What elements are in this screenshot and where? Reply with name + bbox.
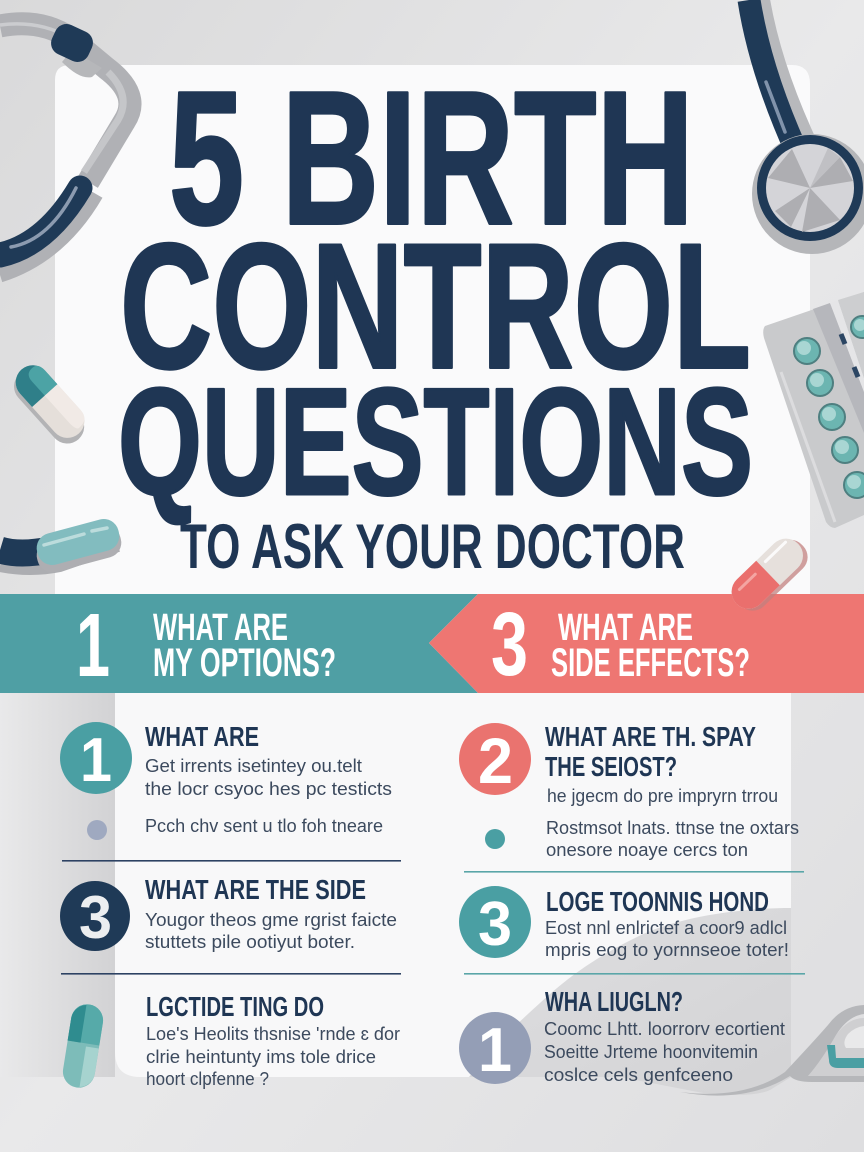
- heading: WHAT ARE TH. SPAY: [545, 721, 756, 752]
- body: [546, 786, 799, 860]
- band heading left: WHAT ARE: [153, 607, 288, 649]
- body: [145, 910, 397, 952]
- body: Get irrents isetintey ou.telt: [145, 756, 362, 776]
- divider left 2: [61, 973, 401, 975]
- band: teal option: [0, 594, 478, 696]
- icon: blister pack: [763, 292, 864, 528]
- body: [545, 918, 789, 960]
- body: [544, 1019, 785, 1085]
- body: [146, 1024, 400, 1089]
- badge 3: [60, 881, 130, 951]
- question: left 3: [60, 874, 397, 952]
- divider right 2: [464, 973, 805, 975]
- badge 1: [60, 722, 132, 795]
- heading: WHAT ARE: [145, 721, 259, 752]
- heading: THE SEIOST?: [545, 751, 677, 782]
- body: [145, 756, 392, 836]
- band heading left: [153, 607, 336, 685]
- icon: stethoscope top left: [0, 20, 130, 275]
- heading: WHA LIUGLN?: [545, 986, 683, 1017]
- body: Yougor theos gme rgrist faicte: [145, 910, 397, 930]
- badge 3: [459, 886, 531, 959]
- question: right 2: [459, 721, 799, 860]
- badge 3: 3: [79, 884, 112, 951]
- body: mpris eog to yornnseoe toter!: [545, 940, 789, 960]
- badge 1: [459, 1012, 531, 1085]
- number 3: 3: [491, 595, 528, 695]
- badge 1: 1: [80, 726, 112, 795]
- badge 2: [459, 723, 531, 797]
- bullet dot: [485, 829, 505, 849]
- question: right 3: [459, 886, 789, 960]
- body: Loe's Heolits thsnise 'rnde ɛ ɗor: [146, 1024, 400, 1044]
- badge 3: 3: [478, 890, 512, 959]
- question: right 1: [459, 986, 785, 1085]
- body: Soeitte Jrteme hoonvitemin: [544, 1042, 758, 1062]
- band heading right: WHAT ARE: [558, 607, 693, 649]
- badge 1: 1: [478, 1016, 512, 1085]
- band heading right: [551, 607, 750, 685]
- body: he jgecm do pre impryrn trrou: [547, 786, 778, 806]
- divider right 1: [464, 871, 804, 873]
- heading: LOGE TOONNIS HOND: [546, 886, 769, 917]
- body: onesore noaye cercs ton: [546, 840, 748, 860]
- heading: [545, 721, 756, 782]
- icon: stethoscope top right: [749, 0, 864, 254]
- panel: lower question card: [115, 693, 791, 1077]
- band heading left: MY OPTIONS?: [153, 641, 336, 685]
- body: Coomc Lhtt. loorrorv ecortient: [544, 1019, 785, 1039]
- icon: teal and white capsule: [6, 358, 94, 451]
- body: hoort clpfenne ?: [146, 1069, 269, 1089]
- badge 2: 2: [478, 725, 513, 797]
- icon: red and white capsule: [725, 530, 814, 619]
- body: the locr csyoc hes pc testicts: [145, 779, 392, 799]
- swoosh: bottom right stethoscope shadow: [469, 908, 791, 1095]
- icon: stethoscope bottom right: [680, 1005, 864, 1096]
- bullet dot: [87, 820, 107, 840]
- divider left 1: [62, 860, 401, 862]
- heading: LGCTIDE TING DO: [146, 991, 324, 1022]
- body: Eost nnl enlrictef a coor9 adlcl: [545, 918, 787, 938]
- question: left 1: [60, 721, 392, 840]
- panel: upper title card: [55, 65, 810, 693]
- icon: stethoscope tube and capsule left: [0, 516, 125, 576]
- band heading right: SIDE EFFECTS?: [551, 641, 750, 685]
- band: coral option: [429, 594, 864, 695]
- body: Pcch chv sent u tlo foh tneare: [145, 816, 383, 836]
- question: left pill: [61, 991, 400, 1090]
- heading: WHAT ARE THE SIDE: [145, 874, 366, 905]
- body: clrie heintunty ims tole drice: [146, 1047, 376, 1067]
- number 1: 1: [76, 596, 110, 696]
- body: Rostmsot lnats. ttnse tne oxtars: [546, 818, 799, 838]
- body: coslce cels genfceeno: [544, 1065, 733, 1085]
- icon: teal capsule: [61, 1002, 105, 1090]
- body: stuttets pile ootiyut boter.: [145, 932, 355, 952]
- blister pills: [794, 316, 864, 498]
